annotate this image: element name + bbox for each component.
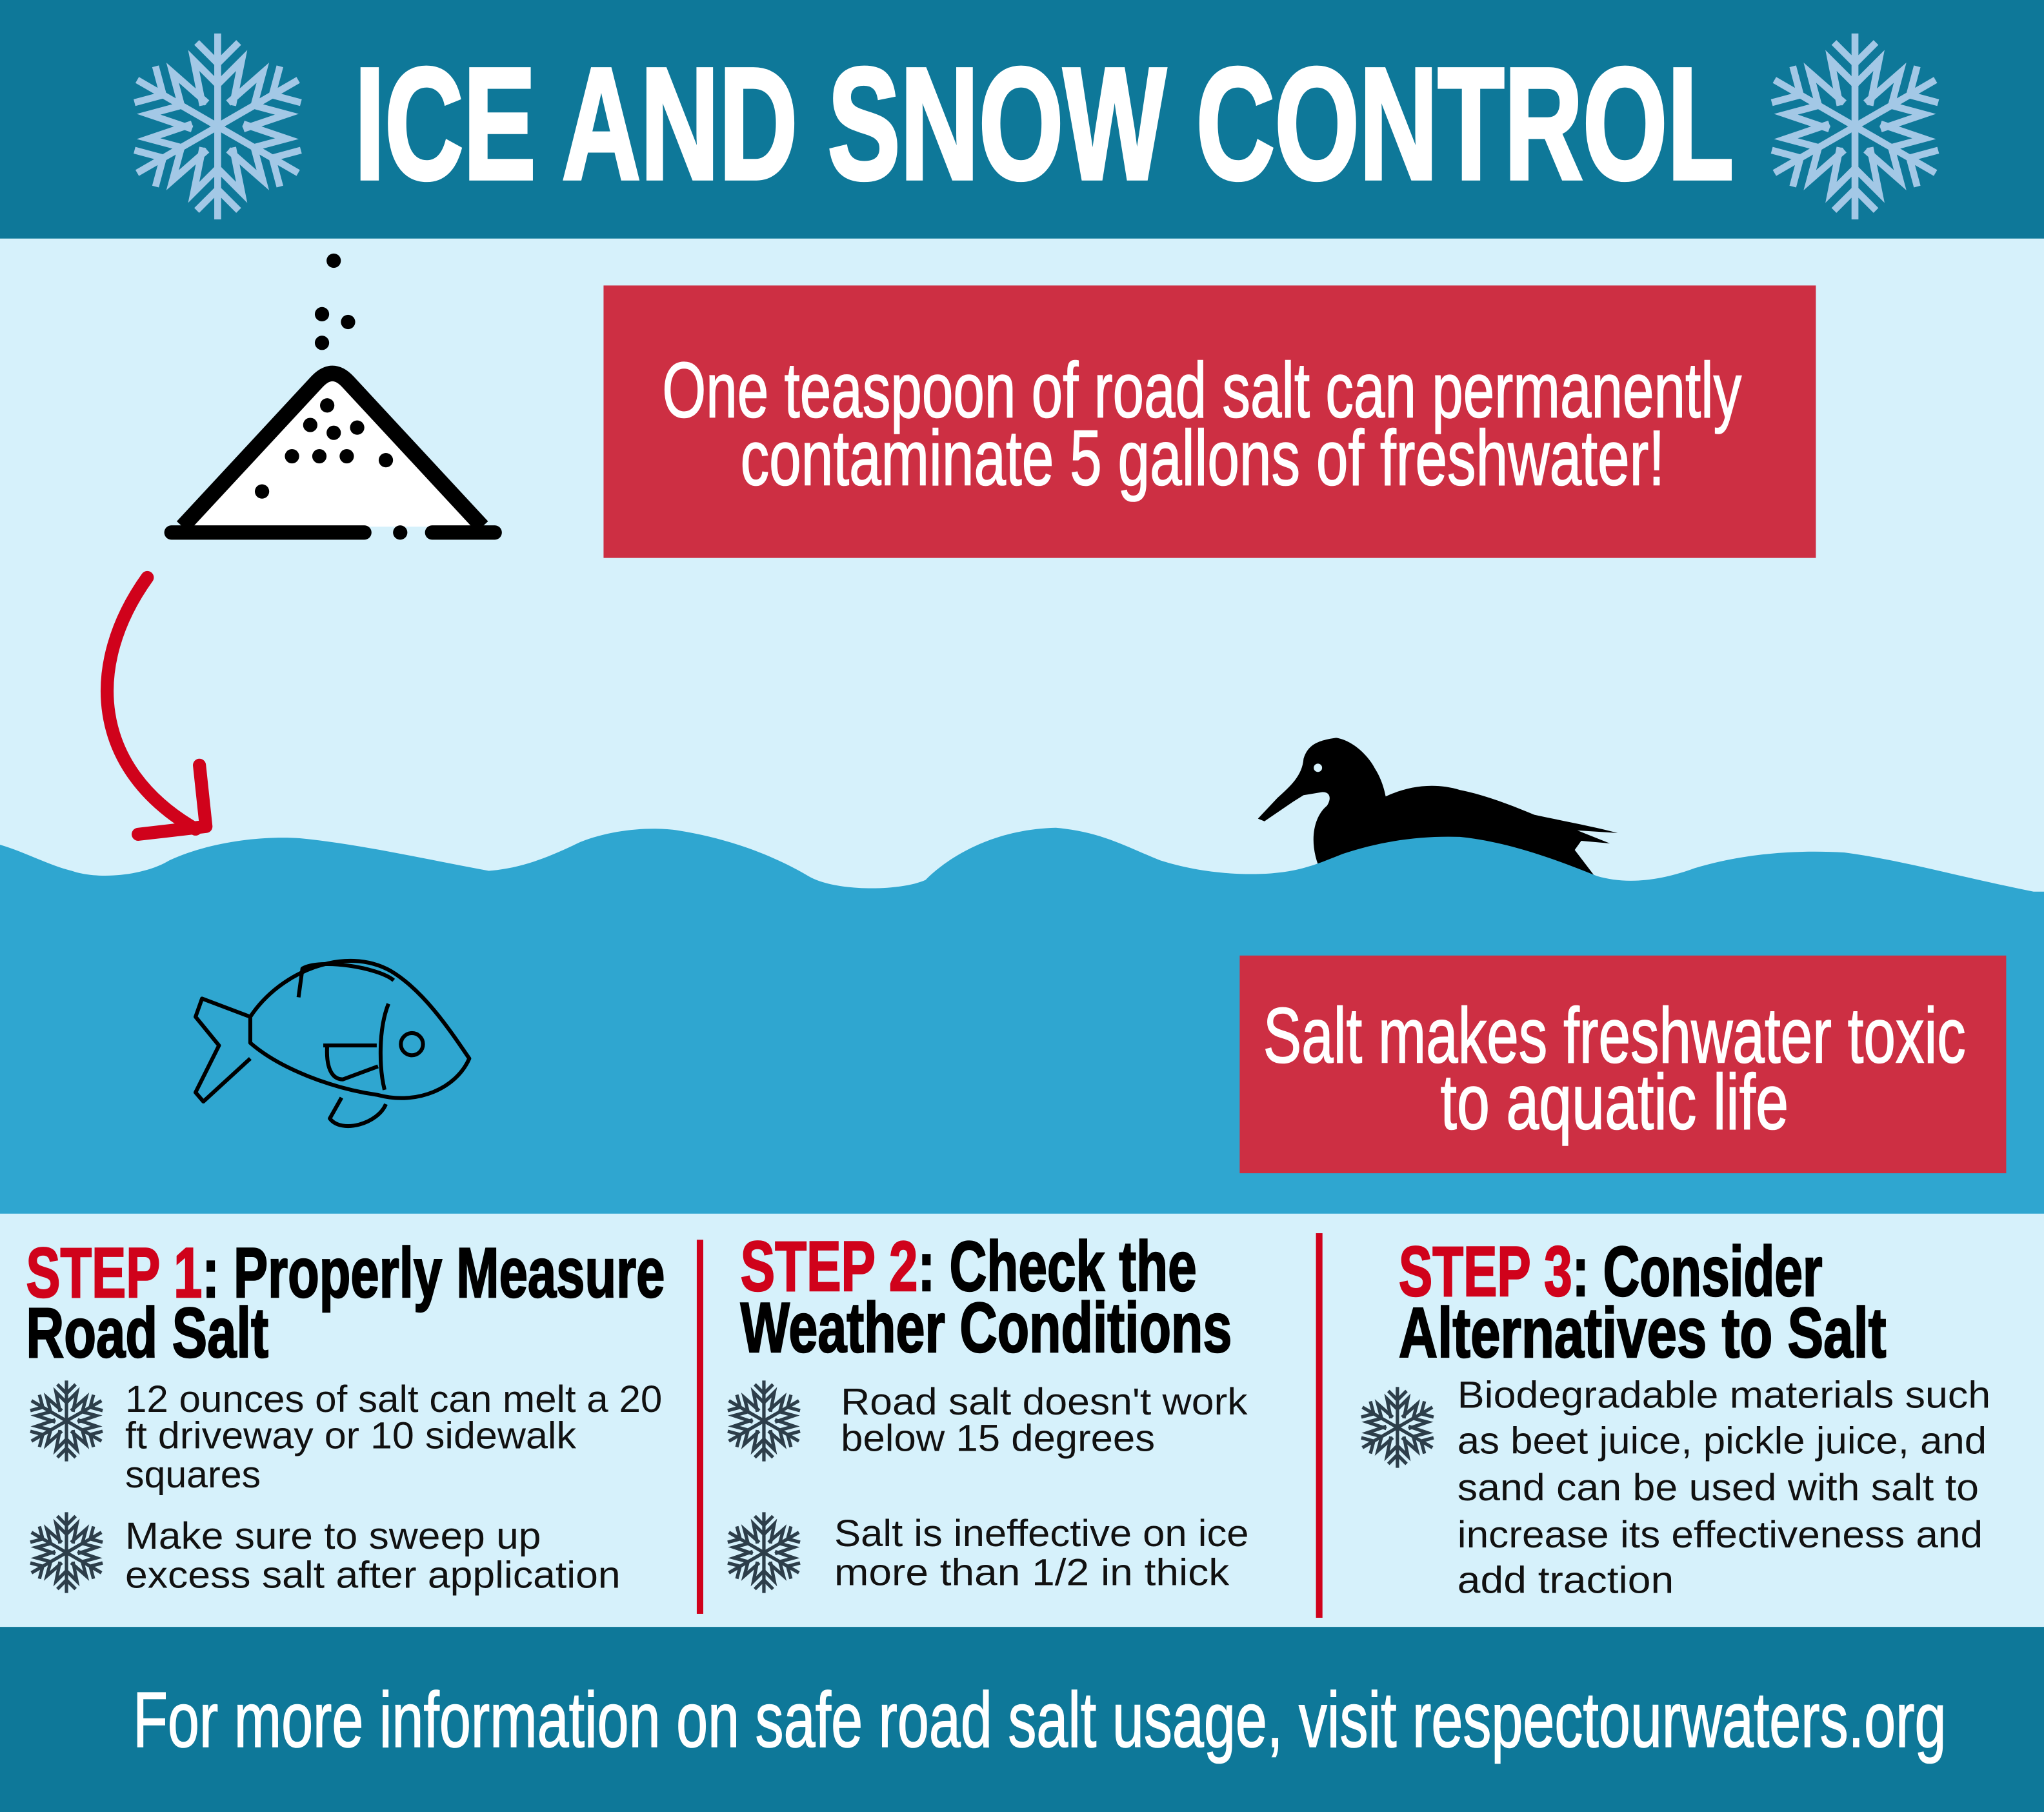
panel: step 1	[26, 1234, 665, 1596]
icon: snowflake bullet	[26, 1380, 106, 1462]
icon: snowflake bullet	[26, 1512, 106, 1593]
heading: step 2: STEP 2: Check the	[741, 1227, 1197, 1306]
icon: fish	[195, 961, 469, 1126]
text: bullet 2: more than 1/2 in thick	[834, 1551, 1230, 1593]
water	[0, 828, 2044, 1214]
text: bullet: as beet juice, pickle juice, and	[1458, 1420, 1987, 1462]
icon: salt pile	[165, 254, 502, 539]
icon: header snowflake right	[1763, 34, 1947, 219]
heading: step 2	[741, 1227, 1232, 1367]
text: bullet: Biodegradable materials such	[1458, 1374, 1990, 1416]
header band	[0, 0, 2044, 239]
text: bullet 2: Salt is ineffective on ice	[834, 1513, 1249, 1555]
heading: step 3	[1399, 1233, 1887, 1373]
heading: step 3: Alternatives to Salt	[1399, 1294, 1887, 1373]
text: bullet 2	[834, 1513, 1249, 1593]
text: bullet 1: squares	[125, 1454, 261, 1496]
callout: teaspoon fact	[603, 285, 1816, 558]
text: bullet 1: 12 ounces of salt can melt a 20	[125, 1378, 662, 1420]
text: bullet: sand can be used with salt to	[1458, 1467, 1979, 1509]
text: bullet 1: ft driveway or 10 sidewalk	[125, 1414, 577, 1456]
footer	[0, 1627, 2044, 1812]
icon: duck	[1258, 738, 1618, 878]
panel: step 3	[1358, 1233, 1990, 1602]
callout: toxic to aquatic life	[1239, 956, 2006, 1173]
icon: header snowflake left	[125, 34, 310, 219]
callout: toxic to aquatic life: to aquatic life	[1441, 1058, 1788, 1145]
text: bullet 2	[125, 1515, 621, 1596]
text: bullet 1	[841, 1381, 1248, 1459]
text: bullet 2: Make sure to sweep up	[125, 1515, 541, 1557]
heading: step 2: Weather Conditions	[741, 1289, 1232, 1367]
heading: step 1	[26, 1234, 665, 1373]
heading: step 1: Road Salt	[26, 1294, 268, 1373]
icon: snowflake bullet	[1358, 1387, 1438, 1468]
divider lines	[697, 1240, 703, 1614]
arrow: salt into water	[107, 578, 206, 834]
text: bullet 2: excess salt after application	[125, 1555, 621, 1596]
text: bullet 1: Road salt doesn't work	[841, 1381, 1248, 1423]
text: bullet 1: below 15 degrees	[841, 1417, 1155, 1459]
icon: duck eye	[1314, 763, 1322, 772]
heading: step 1: STEP 1: Properly Measure	[26, 1234, 665, 1313]
icon: snowflake bullet	[724, 1380, 804, 1462]
panel: step 2	[724, 1227, 1249, 1593]
text: bullet 1	[125, 1378, 662, 1496]
text: bullet	[1458, 1374, 1990, 1602]
heading: step 3: STEP 3: Consider	[1399, 1233, 1823, 1311]
icon: snowflake bullet	[724, 1512, 804, 1593]
text: bullet: add traction	[1458, 1560, 1674, 1602]
text: bullet: increase its effectiveness and	[1458, 1514, 1983, 1556]
callout: teaspoon fact: contaminate 5 gallons of freshwater!	[741, 414, 1665, 501]
